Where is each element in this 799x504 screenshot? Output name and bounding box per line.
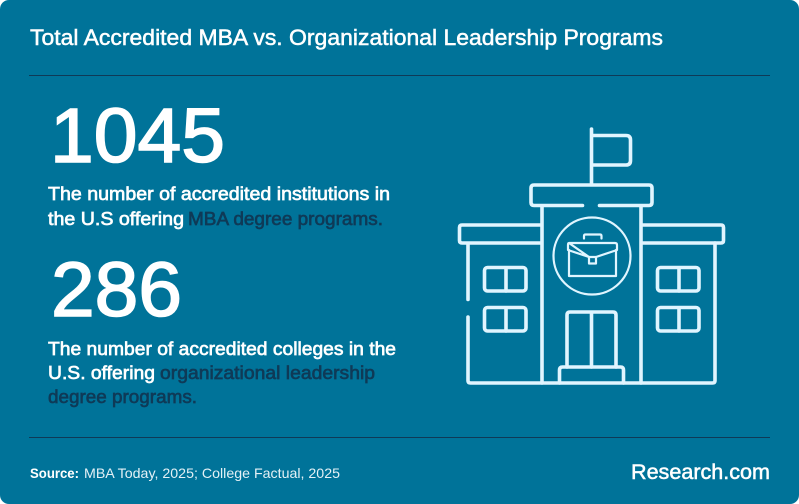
icon: central tower: [542, 206, 641, 383]
description: MBA institutions: The number of accredited institutions in: [48, 184, 390, 204]
icon: flag: [592, 129, 630, 184]
source note: MBA Today, 2025; College Factual, 2025: [84, 465, 340, 481]
description: MBA institutions: MBA degree programs.: [188, 209, 383, 229]
stat: 1045 MBA institutions: [48, 93, 390, 229]
icon: door and step: [560, 312, 624, 383]
number: 1045: 1045: [50, 93, 225, 179]
source note: Source:: [30, 465, 79, 481]
icon: top cornice: [531, 185, 652, 206]
number: 286: 286: [51, 247, 182, 333]
description: organizational leadership colleges: The number of accredited colleges in the: [48, 339, 396, 359]
icon: briefcase in circle: [554, 218, 630, 294]
description: MBA institutions: [48, 184, 390, 229]
description: organizational leadership colleges: U.S. offering: [48, 363, 155, 383]
icon: left wing: [460, 225, 715, 383]
description: MBA institutions: the U.S offering: [48, 209, 184, 229]
icon: right wing cornice: [642, 225, 724, 243]
title: Total Accredited MBA vs. Organizational Leadership Programs: [30, 25, 663, 50]
icon: school building with briefcase: [460, 129, 724, 383]
icon: right windows: [658, 268, 699, 331]
description: organizational leadership colleges: [48, 339, 396, 407]
logo: Research.com: Research.com: [631, 461, 770, 484]
icon: left windows: [484, 268, 526, 331]
description: organizational leadership colleges: degree programs.: [48, 387, 197, 407]
description: organizational leadership colleges: organizational leadership: [160, 363, 375, 383]
stat: 286 organizational leadership colleges: [48, 247, 396, 407]
